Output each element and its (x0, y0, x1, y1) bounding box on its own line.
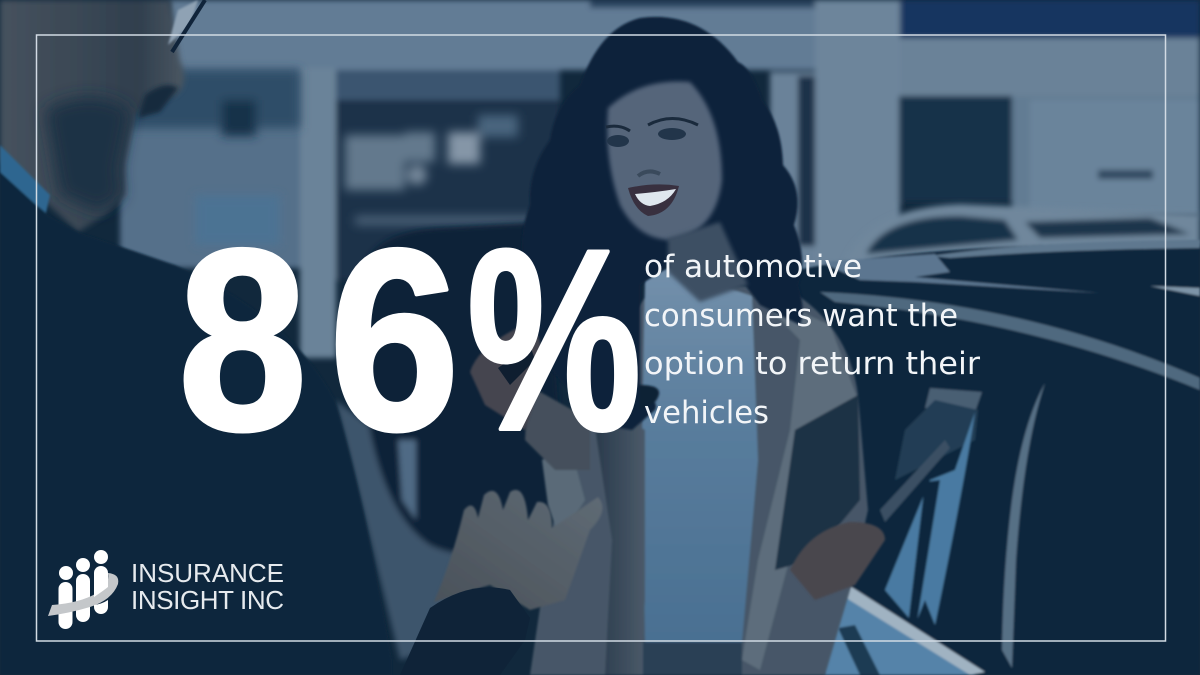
description text: vehicles (644, 395, 769, 431)
logo wordmark: INSIGHT INC (131, 585, 284, 615)
woman: blazer and shirt (525, 268, 868, 675)
hands exchanging key (400, 322, 885, 675)
description text (644, 249, 980, 431)
big statistic: 8 (178, 197, 307, 485)
left window (120, 68, 305, 268)
big statistic (178, 196, 641, 485)
foreground car (790, 240, 1200, 675)
woman: face and smile (606, 82, 748, 302)
description text: option to return their (644, 346, 980, 382)
man: jacket (0, 145, 392, 675)
background car and ground (335, 204, 1200, 660)
description text: of automotive (644, 249, 862, 285)
woman: hair (517, 17, 803, 430)
big statistic: % (467, 196, 641, 484)
soft window and showroom details (125, 70, 545, 245)
description text: consumers want the (644, 298, 958, 334)
big statistic: 6 (329, 197, 460, 484)
logo icon: three figures with swoosh (48, 550, 118, 629)
logo: Insurance Insight Inc (48, 550, 284, 629)
logo wordmark (131, 558, 284, 615)
man: head and glasses (0, 0, 205, 232)
logo wordmark: INSURANCE (131, 558, 284, 588)
